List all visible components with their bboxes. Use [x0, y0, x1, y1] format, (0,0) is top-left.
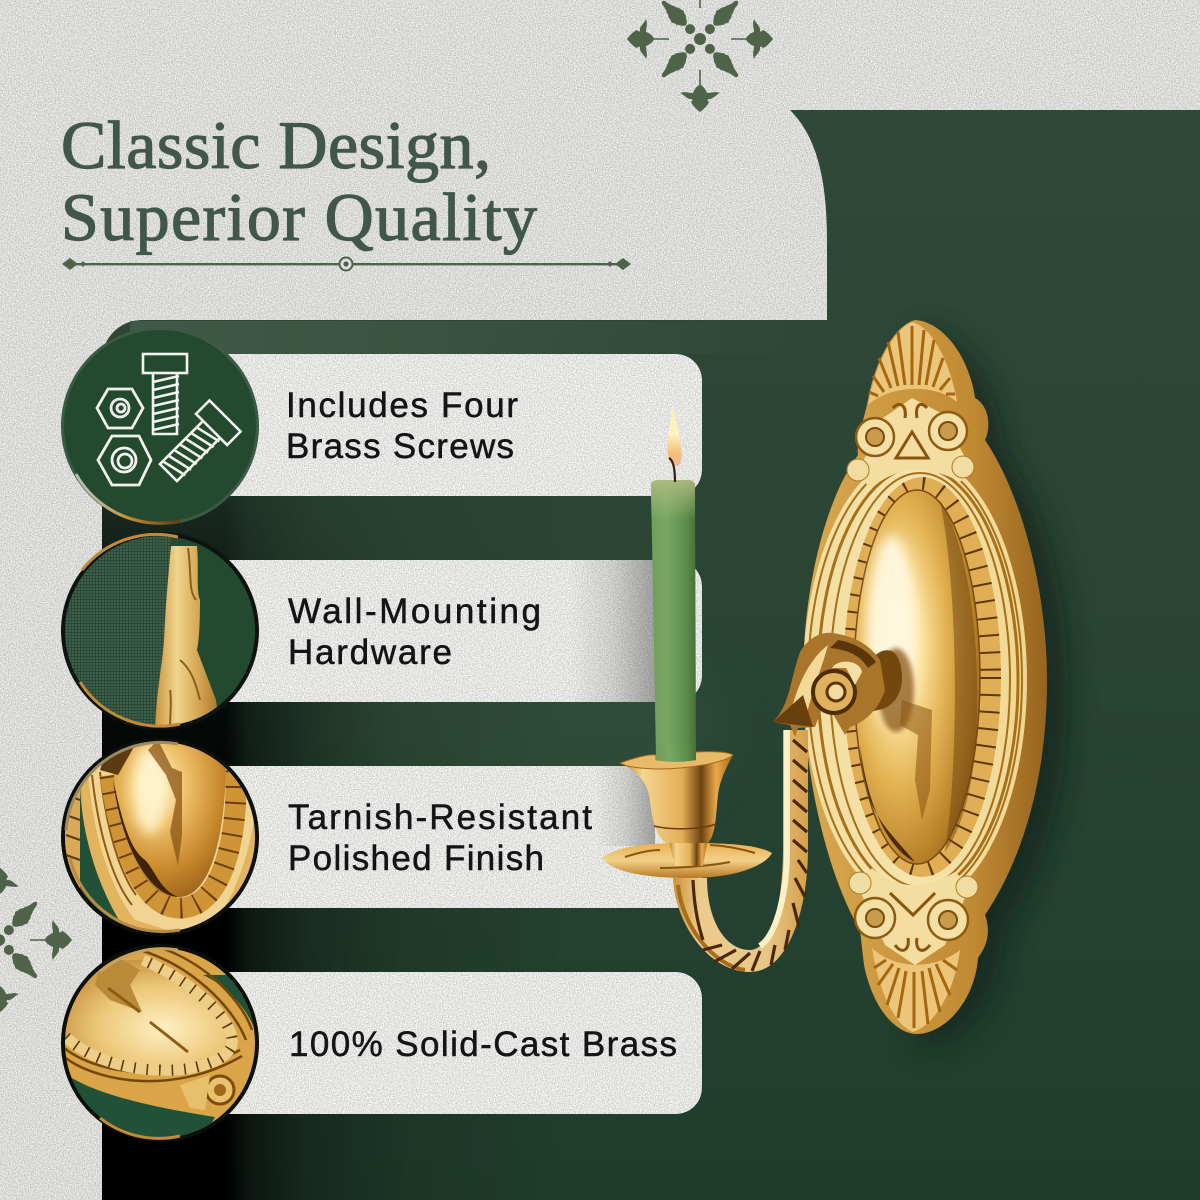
badge: wall mounting photo: [60, 530, 260, 735]
candle cup and pan: [602, 745, 772, 878]
outer rim lines: [62, 1055, 242, 1081]
bead ring: [66, 960, 232, 1070]
title: [61, 107, 537, 255]
candle foot: [656, 745, 696, 762]
bead ring: [110, 770, 236, 908]
cup band: [654, 824, 716, 829]
reflection: [148, 740, 182, 866]
line 2: Brass Screws: [286, 427, 514, 466]
scroll boss: [813, 671, 855, 713]
icon: small nut: [97, 389, 143, 428]
arm highlight: [760, 730, 787, 946]
line 1: Wall-Mounting: [288, 592, 541, 631]
stem reflection on dome: [878, 648, 914, 732]
sconce arm: [673, 633, 914, 972]
dome reflection: [900, 700, 932, 820]
bottom scrolls: [849, 868, 978, 965]
arm body: [673, 730, 808, 972]
top crest fan: [868, 322, 957, 405]
dome highlight: [868, 535, 916, 725]
green wall wedge: [80, 785, 122, 925]
card hardware: candle shadow: [570, 560, 655, 702]
scroll: [206, 1076, 234, 1104]
top scrolls: [847, 398, 974, 490]
top strip highlight: [130, 321, 827, 354]
plate body: [803, 320, 1047, 1034]
card: finish: [160, 766, 702, 908]
candle body: [651, 480, 696, 760]
dome: [854, 490, 980, 864]
badge: screws icon: [61, 327, 259, 525]
stem to dome: [858, 650, 902, 715]
icon: bolt angled: [153, 400, 241, 488]
leaf collar: [773, 633, 885, 737]
dome: [112, 740, 226, 897]
textured wall: [65, 536, 172, 724]
badge: solid brass photo: [60, 944, 260, 1145]
icon: bolt upright: [143, 354, 187, 434]
candle top tint: [651, 480, 695, 520]
bottom crest fan: [872, 948, 960, 1032]
left ornament: [0, 867, 72, 1013]
arm twist lines: [693, 740, 807, 971]
label: screws: [286, 386, 518, 466]
dome dark crescent: [113, 780, 178, 897]
cream rim: [88, 740, 258, 940]
sconce backplate: [803, 320, 1047, 1034]
dome highlight: [133, 746, 167, 834]
card: brass: [160, 972, 702, 1114]
flame: [667, 406, 681, 466]
title divider: [62, 258, 631, 270]
card: hardware: [160, 560, 702, 702]
dome dark crescent: [860, 745, 915, 862]
label: brass: 100% Solid-Cast Brass: [289, 1025, 677, 1064]
arm leaf: [95, 958, 142, 1012]
label: finish: [288, 798, 592, 878]
cup neck: [668, 838, 708, 866]
badge: polished finish photo: [60, 738, 260, 940]
line 1: Includes Four: [286, 386, 518, 425]
card: screws: [160, 354, 702, 496]
cup rim: [620, 752, 733, 769]
top ornament: [627, 0, 773, 112]
arm inner shading: [678, 885, 745, 970]
drip pan: [602, 843, 772, 878]
sconce shadow: [920, 330, 1068, 1045]
line 2: Polished Finish: [288, 839, 544, 878]
icon: large nut: [98, 436, 151, 485]
plate face: [803, 454, 1027, 906]
dark shadow on left wall: [102, 496, 400, 1200]
arm fragment: [65, 788, 82, 890]
brass edge: [155, 546, 218, 735]
line 2: Hardware: [288, 633, 452, 672]
wick: [669, 458, 675, 482]
label: hardware: [288, 592, 541, 672]
title line 2: Superior Quality: [61, 179, 537, 255]
cup bowl: [620, 755, 733, 843]
card finish: cup shadow: [595, 766, 655, 846]
wall light bloom: [320, 640, 720, 820]
line 1: Tarnish-Resistant: [288, 798, 592, 837]
bead ring: [843, 477, 1001, 877]
dome: [66, 960, 227, 1065]
title line 1: Classic Design,: [61, 107, 491, 183]
green wall pieces: [72, 1078, 215, 1137]
rim grooves: [808, 460, 1022, 900]
candle: [651, 406, 696, 760]
